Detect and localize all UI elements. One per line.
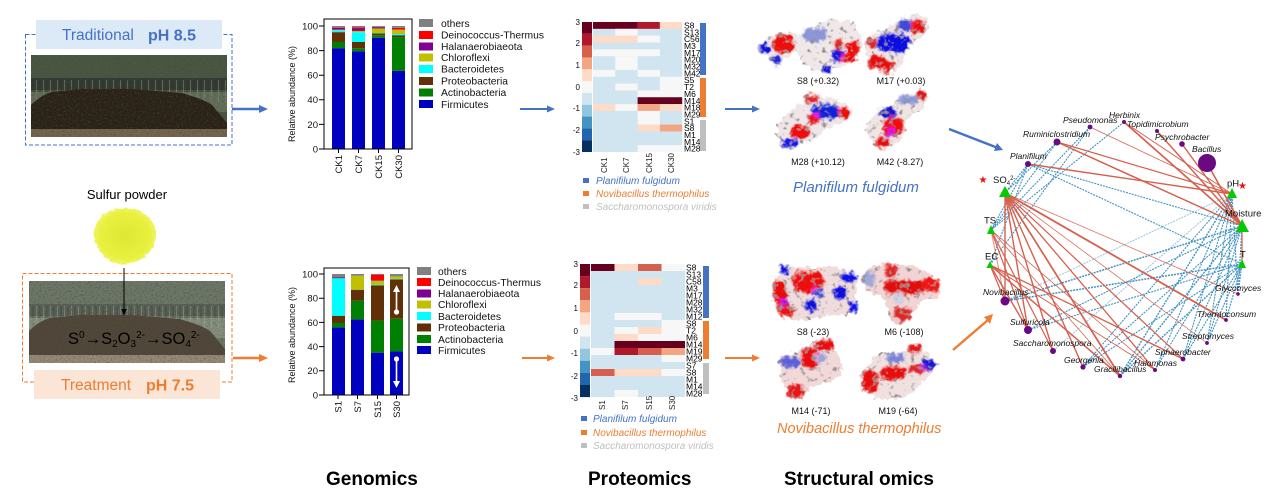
arrow: firmicutes decrease [393, 356, 400, 388]
species name: Novibacillus thermophilus: Novibacillus thermophilus [777, 421, 941, 437]
legend: Saccharomonospora viridis [593, 441, 714, 452]
tick labels: 0 [313, 390, 318, 402]
protein labels: M6 [686, 332, 698, 342]
species side bars [700, 23, 706, 151]
taxa labels: Planifilum [1010, 151, 1047, 161]
protein labels: M28 [686, 298, 703, 308]
color scale [580, 264, 590, 397]
legend: others [441, 19, 470, 30]
scale labels [573, 18, 581, 157]
label: M17: M17 (+0.03) [877, 76, 925, 86]
chart: treatment stacked bars [287, 267, 541, 418]
protein labels: M17 [684, 48, 701, 58]
label: sulfur conversion formula: 0 [79, 330, 85, 341]
scale labels: -1 [571, 349, 579, 358]
legend: Chloroflexi [438, 300, 487, 311]
label: sulfur conversion formula: S [68, 330, 79, 348]
tick labels: 80 [307, 294, 318, 304]
taxa labels: Glycomyces [1215, 283, 1262, 293]
arrow: sulfur powder into pile [122, 268, 126, 316]
protein labels: S8 [684, 20, 695, 30]
protein labels: M6 [684, 89, 696, 99]
legend: Novibacillus thermophilus [596, 189, 709, 200]
scale labels: -1 [573, 104, 581, 113]
label: Treatment pH 7.5 [34, 370, 220, 399]
protein labels: M28 [686, 388, 703, 398]
environmental factor labels: EC [985, 252, 998, 262]
tick labels: 60 [307, 318, 318, 329]
stars: key factors [978, 175, 1247, 192]
taxa labels: Georgenia [1064, 355, 1104, 365]
environmental factor nodes [986, 186, 1249, 268]
taxa labels: Halomonas [1134, 358, 1178, 368]
stars: key factors: ★ [978, 175, 988, 186]
protein labels: M12 [686, 312, 703, 322]
protein labels: S8 [686, 262, 697, 272]
scale labels: 3 [576, 18, 581, 27]
arrow: treatment to genomics [233, 354, 268, 362]
protein labels: M1 [686, 374, 698, 384]
taxa labels: Thermoconsum [1197, 309, 1256, 319]
label: S8: S8 (+0.32) [797, 76, 839, 86]
arrow: structure to network bottom [953, 314, 993, 350]
column labels: S1 [598, 400, 607, 410]
dashed frame: traditional [26, 34, 232, 145]
tick labels: 80 [307, 46, 318, 57]
tick labels: S15 [373, 401, 384, 418]
scale labels: 1 [574, 304, 579, 313]
column labels: CK7 [622, 157, 631, 173]
axes [319, 268, 409, 399]
column labels: CK1 [600, 157, 609, 173]
environmental factor labels: 4 [1007, 181, 1011, 187]
scale labels [571, 260, 579, 403]
legend: Proteobacteria [438, 323, 505, 334]
axis title: Relative abundance (%) [287, 46, 297, 142]
cells [593, 22, 682, 152]
taxa nodes [1000, 120, 1240, 378]
scale labels: -3 [573, 148, 581, 157]
column labels: CK15 [645, 152, 654, 173]
protein labels: M3 [686, 284, 698, 294]
protein labels: M14 [684, 137, 701, 147]
column labels: S15 [645, 395, 654, 410]
label: sulfur powder: Sulfur powder [87, 187, 168, 202]
tick labels: 100 [302, 270, 318, 280]
scale labels: -3 [571, 394, 579, 403]
label: Traditional pH 8.5 [36, 20, 222, 49]
edges: negative [990, 122, 1242, 376]
panel: Planifilum protein structures [762, 15, 928, 196]
legend: Saccharomonospora viridis [596, 202, 717, 213]
environmental factor labels: T [1240, 250, 1246, 260]
heading: Genomics: Genomics [326, 469, 418, 490]
environmental factor labels [984, 175, 1261, 262]
environmental factor labels: TS [984, 216, 996, 226]
label: sulfur conversion formula: 2- [136, 330, 145, 341]
legend: Planifilum fulgidum [593, 414, 677, 425]
legend: Deinococcus-Thermus [441, 30, 544, 42]
protein labels: M17 [686, 290, 703, 300]
stars: key factors: ★ [1238, 181, 1247, 192]
legend: others [438, 267, 467, 278]
tick labels: S1 [334, 401, 344, 413]
taxa labels: Gracilibacillus [1094, 364, 1147, 374]
tick labels: CK30 [394, 155, 405, 179]
label: sulfur conversion formula: 2- [191, 330, 200, 341]
protein labels: S7 [686, 360, 697, 370]
protein: M19 bottom [863, 346, 935, 400]
taxa labels: Sphaerobacter [1155, 347, 1212, 357]
environmental factor labels: Moisture [1225, 208, 1261, 220]
protein labels: S13 [684, 27, 699, 37]
label: sulfur conversion formula: →SO [145, 330, 185, 348]
tick labels: CK1 [334, 155, 345, 173]
protein: M42 top [867, 92, 927, 147]
protein labels [686, 262, 703, 398]
protein labels: S1 [684, 116, 695, 126]
environmental factor labels: SO [993, 175, 1007, 186]
panel: traditional compost [26, 20, 232, 145]
protein labels: S5 [684, 75, 695, 85]
legend: Actinobacteria [438, 335, 504, 346]
label: sulfur conversion formula: O [118, 330, 131, 348]
protein labels: C56 [684, 34, 700, 44]
legend: Halanaerobiaeota [438, 289, 520, 300]
protein labels: S8 [686, 318, 697, 328]
protein labels: M14 [684, 96, 701, 106]
label: sulfur conversion formula: →S [85, 330, 112, 348]
label: Traditional pH 8.5: pH 8.5 [148, 28, 196, 44]
heading: Structural omics: Structural omics [784, 469, 934, 490]
protein labels: M42 [684, 68, 701, 78]
species name: Planifilum fulgidum: Planifilum fulgidum [793, 179, 919, 196]
scale labels: 0 [576, 83, 581, 92]
scale labels: 1 [576, 61, 581, 70]
label: sulfur conversion formula: 4 [185, 339, 191, 350]
tick labels: 40 [307, 95, 318, 106]
protein labels [684, 20, 701, 154]
cells [591, 264, 685, 397]
heatmap: treatment proteomics [571, 260, 714, 452]
scale labels: 0 [574, 327, 579, 336]
legend [581, 414, 714, 452]
scale labels: 3 [574, 260, 579, 269]
scale labels: -2 [573, 126, 581, 135]
arrow: proteomics to structure bottom [725, 354, 760, 362]
chart: traditional stacked bars [287, 19, 544, 179]
bars [332, 274, 403, 395]
protein: M6 bottom [862, 264, 941, 324]
heatmap: traditional proteomics [573, 18, 717, 213]
tick labels [302, 22, 405, 179]
panel: treatment compost [22, 274, 232, 399]
arrow: proteobacteria increase [393, 285, 400, 315]
legend: Halanaerobiaeota [441, 42, 523, 53]
icon: sulfur powder pile [94, 208, 156, 264]
chart: correlation network [978, 110, 1262, 378]
heading: Proteomics: Proteomics [588, 469, 691, 490]
column labels: S30 [668, 395, 677, 410]
label: Treatment pH 7.5: Treatment [61, 377, 132, 394]
label: M42: M42 (-8.27) [877, 157, 923, 167]
label: sulfur conversion formula: 2 [112, 339, 118, 350]
legend [583, 176, 717, 213]
protein: M14 bottom [778, 340, 841, 399]
legend: Chloroflexi [441, 53, 490, 64]
protein labels: M3 [684, 41, 696, 51]
legend: Actinobacteria [441, 88, 507, 99]
protein labels: T2 [686, 326, 696, 336]
legend: Firmicutes [438, 346, 485, 357]
legend [419, 19, 544, 111]
legend: Bacteroidetes [438, 312, 501, 323]
protein labels: M29 [686, 354, 703, 364]
edges: positive [990, 122, 1242, 376]
arrow: proteomics to structure top [725, 106, 760, 112]
column labels [598, 395, 677, 410]
axes [319, 19, 412, 153]
arrow: traditional to genomics [232, 105, 268, 113]
axis title: Relative abundance (%) [287, 287, 297, 383]
legend: Proteobacteria [441, 76, 508, 88]
tick labels: S7 [353, 401, 364, 413]
panel: Novibacillus protein structures [775, 264, 941, 437]
protein labels: M14 [686, 382, 703, 392]
column labels: CK30 [667, 152, 676, 173]
protein: S8 bottom [775, 266, 856, 320]
protein labels: T2 [684, 82, 694, 92]
tick labels: 20 [307, 366, 318, 377]
legend: Firmicutes [441, 100, 488, 111]
legend: Novibacillus thermophilus [593, 428, 706, 439]
protein: M28 top [777, 96, 853, 146]
tick labels: 100 [302, 22, 318, 32]
protein labels: M1 [684, 130, 696, 140]
label: M14 bottom: M14 (-71) [791, 406, 831, 416]
scale labels: -2 [571, 372, 579, 381]
legend: Bacteroidetes [441, 64, 504, 76]
taxa labels: Sulfuricola [1010, 317, 1050, 327]
arrow: genomics to proteomics top [520, 106, 555, 112]
photo: treated compost pile [29, 281, 225, 363]
tick labels: 20 [307, 120, 318, 131]
protein labels: C58 [686, 276, 702, 286]
legend [417, 267, 541, 357]
label: M28: M28 (+10.12) [791, 157, 845, 167]
taxa labels: Ruminiclostridium [1023, 129, 1090, 139]
color scale [582, 22, 592, 152]
taxa labels: Topidimicrobium [1127, 119, 1189, 129]
protein labels: M19 [686, 346, 703, 356]
taxa labels: Bacillus [1192, 144, 1222, 154]
column labels: S7 [621, 400, 630, 410]
tick labels: CK7 [354, 155, 365, 173]
taxa labels: Herbinix [1109, 110, 1141, 120]
taxa labels: Streptomyces [1182, 331, 1235, 341]
protein labels: M32 [684, 62, 701, 72]
tick labels: 40 [307, 342, 318, 353]
tick labels [302, 270, 403, 418]
photo: compost pile [31, 55, 227, 137]
label: M6: M6 (-108) [884, 327, 924, 337]
protein labels: M29 [684, 109, 701, 119]
environmental factor labels: 2- [1010, 176, 1015, 182]
protein labels: M32 [686, 304, 703, 314]
protein labels: M18 [684, 103, 701, 113]
protein labels: M20 [684, 55, 701, 65]
taxa labels: Psychrobacter [1155, 132, 1210, 142]
arrow: genomics to proteomics bottom [522, 354, 555, 362]
legend: Deinococcus-Thermus [438, 278, 541, 289]
environmental factor labels: pH [1227, 178, 1239, 190]
protein labels: S8 [684, 123, 695, 133]
legend: Planifilum fulgidum [596, 176, 680, 187]
protein labels: S8 [686, 368, 697, 378]
tick labels: CK15 [374, 155, 385, 179]
taxa labels: Saccharomonospora [1013, 338, 1092, 348]
label: M19 bottom: M19 (-64) [878, 406, 918, 416]
label: sulfur conversion formula: 3 [130, 339, 136, 350]
taxa labels: Pseudomonas [1063, 115, 1118, 125]
scale labels: 2 [576, 39, 581, 48]
tick labels: S30 [392, 401, 403, 418]
label: Treatment pH 7.5: pH 7.5 [146, 378, 194, 394]
protein: M17 top [866, 15, 928, 73]
label: S8 bottom: S8 (-23) [797, 327, 829, 337]
dashed frame: treatment [22, 274, 232, 382]
protein labels: M14 [686, 340, 703, 350]
tick labels: 60 [307, 70, 318, 82]
scale labels: 2 [574, 281, 579, 290]
protein labels: S13 [686, 270, 701, 280]
taxa labels: Novibacillus [983, 287, 1029, 297]
protein: S8 top [762, 20, 862, 72]
species side bars [703, 266, 709, 394]
bars [332, 26, 405, 149]
column labels [600, 152, 676, 173]
tick labels: 0 [313, 144, 318, 156]
arrow: structure to network top [949, 129, 1003, 151]
taxa labels [983, 110, 1262, 374]
label: Traditional pH 8.5: Traditional [62, 27, 134, 44]
protein labels: M28 [684, 144, 701, 154]
